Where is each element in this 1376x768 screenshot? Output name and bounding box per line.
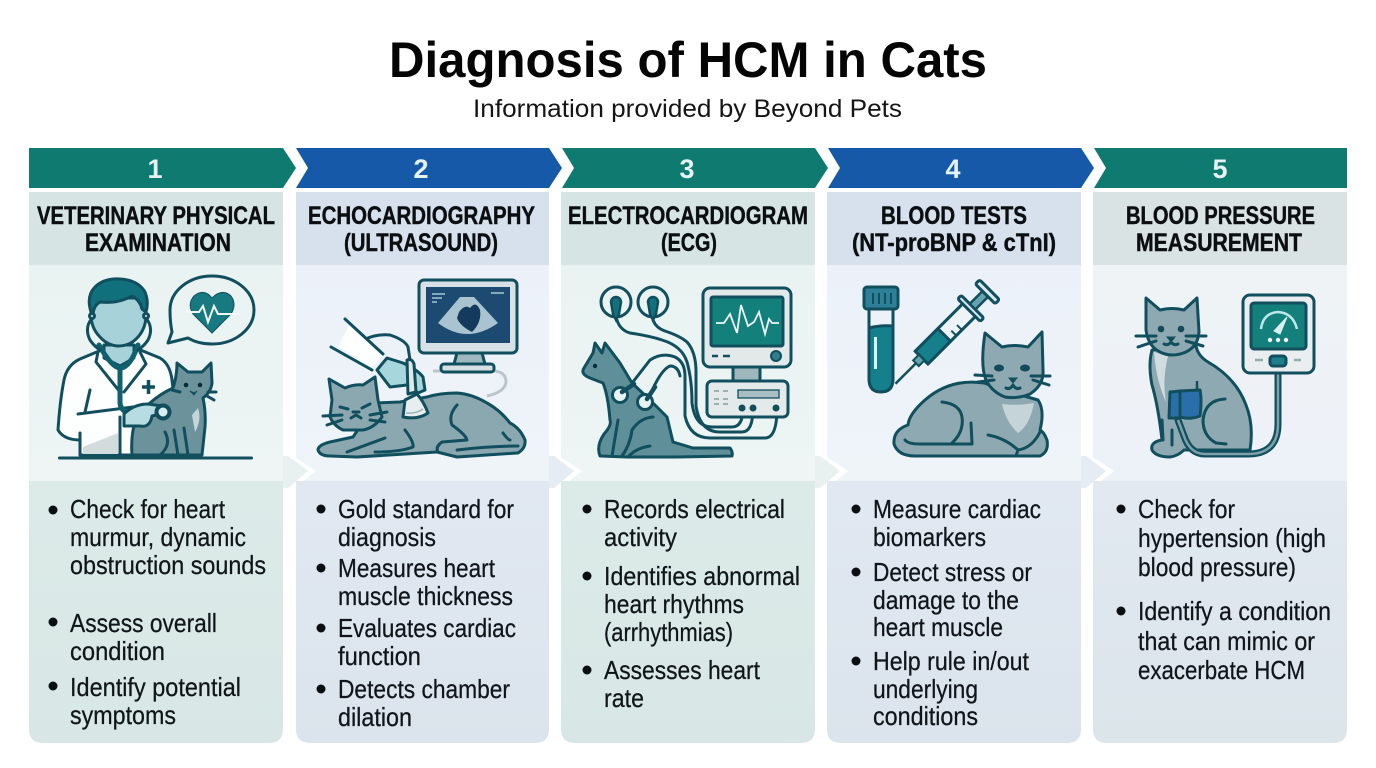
step 5 connector arrow	[1081, 450, 1114, 496]
panel: step 5 blood pressure measurement	[1081, 148, 1347, 743]
step 2 heading	[296, 192, 549, 265]
bullets panel: step 3: (arrhythmias)	[604, 617, 733, 647]
bullets panel: step 1: Identify potential	[70, 672, 241, 702]
step 5 heading	[1093, 192, 1347, 265]
step 4 heading: (NT-proBNP & cTnI)	[852, 229, 1056, 257]
step 4 illustration panel	[827, 265, 1081, 481]
bullets panel: step 4: conditions	[873, 701, 978, 731]
icon: blood pressure cuff on cat	[1136, 295, 1314, 457]
step 1 heading: VETERINARY PHYSICAL	[37, 202, 275, 230]
bullets panel: step 3: heart rhythms	[604, 589, 744, 619]
bullets panel: step 5: blood pressure)	[1138, 552, 1296, 582]
step 2 illustration panel	[296, 265, 549, 481]
bullets panel: step 1	[29, 481, 283, 743]
bullets panel: step 4: damage to the	[873, 585, 1019, 615]
step 4 heading	[827, 192, 1081, 265]
bullets panel: step 4: Help rule in/out	[873, 646, 1030, 676]
icon: blood tube, syringe and cat	[864, 278, 1050, 456]
bullets panel: step 3: Assesses heart	[604, 655, 761, 685]
bullets panel: step 1: obstruction sounds	[70, 550, 266, 580]
bullets panel: step 3: Identifies abnormal	[604, 561, 800, 591]
bullets panel: step 5: Check for	[1138, 494, 1235, 524]
bullets panel: step 1: condition	[70, 636, 165, 666]
bullets panel: step 4: Measure cardiac	[873, 494, 1041, 524]
step 4 connector arrow	[815, 450, 848, 496]
step 5 banner: 5	[1212, 154, 1228, 184]
panel: step 4 blood tests	[815, 148, 1094, 743]
bullets panel: step 4: Detect stress or	[873, 557, 1032, 587]
step 3 banner: 3	[679, 154, 695, 184]
bullets panel: step 5: exacerbate HCM	[1138, 655, 1305, 685]
step 3 banner	[562, 148, 828, 188]
step 3 heading	[561, 192, 815, 265]
step 3 heading: (ECG)	[661, 229, 717, 257]
step 1 banner	[29, 148, 296, 188]
step 1 illustration panel	[29, 265, 283, 481]
step 5 banner	[1094, 148, 1347, 188]
step 1 banner: 1	[147, 154, 163, 184]
bullets panel: step 1: murmur, dynamic	[70, 522, 246, 552]
step 2 connector arrow	[283, 450, 316, 496]
bullets panel: step 4: underlying	[873, 674, 978, 704]
bullets panel: step 2: function	[338, 641, 421, 671]
bullets panel: step 4: heart muscle	[873, 612, 1003, 642]
step 2 heading: (ULTRASOUND)	[344, 229, 498, 257]
bullets panel: step 3	[561, 481, 815, 743]
step 2 banner: 2	[413, 154, 429, 184]
step 5 illustration panel	[1093, 265, 1347, 481]
bullets panel: step 2: dilation	[338, 702, 412, 732]
step 3 illustration panel	[561, 265, 815, 481]
bullets panel: step 2	[296, 481, 549, 743]
step 3 heading: ELECTROCARDIOGRAM	[568, 202, 808, 230]
step 2 banner	[296, 148, 562, 188]
step 4 heading: BLOOD TESTS	[881, 202, 1027, 230]
bullets panel: step 4: biomarkers	[873, 522, 986, 552]
panel: step 2 echocardiography	[283, 148, 562, 743]
step 5 heading: MEASUREMENT	[1136, 229, 1302, 257]
bullets panel: step 2: Evaluates cardiac	[338, 613, 516, 643]
icon: ECG on cat	[583, 287, 791, 457]
icon: ultrasound on cat	[318, 280, 525, 457]
bullets panel: step 5: that can mimic or	[1138, 626, 1315, 656]
bullets panel: step 3: Records electrical	[604, 494, 785, 524]
bullets panel: step 3: rate	[604, 683, 644, 713]
step 1 heading: EXAMINATION	[85, 229, 231, 257]
bullets panel: step 2: Measures heart	[338, 553, 496, 583]
icon: veterinarian examining cat	[58, 276, 254, 460]
subtitle: Information provided by Beyond Pets	[473, 95, 902, 123]
bullets panel: step 2: Detects chamber	[338, 674, 510, 704]
step 2 heading: ECHOCARDIOGRAPHY	[308, 202, 535, 230]
step 5 heading: BLOOD PRESSURE	[1126, 202, 1315, 230]
bullets panel: step 2: diagnosis	[338, 522, 436, 552]
panel: step 1 veterinary physical examination	[29, 148, 296, 743]
bullets panel: step 1: symptoms	[70, 700, 176, 730]
bullets panel: step 1: Check for heart	[70, 494, 226, 524]
bullets panel: step 5	[1093, 481, 1347, 743]
bullets panel: step 4	[827, 481, 1081, 743]
step 3 connector arrow	[549, 450, 582, 496]
bullets panel: step 1: Assess overall	[70, 608, 217, 638]
bullets panel: step 5: hypertension (high	[1138, 523, 1326, 553]
title: Diagnosis of HCM in Cats	[389, 32, 987, 88]
step 1 heading	[29, 192, 283, 265]
bullets panel: step 2: muscle thickness	[338, 581, 513, 611]
bullets panel: step 2: Gold standard for	[338, 494, 514, 524]
step 4 banner	[828, 148, 1094, 188]
bullets panel: step 3: activity	[604, 522, 677, 552]
bullets panel: step 5: Identify a condition	[1138, 596, 1331, 626]
step 4 banner: 4	[945, 154, 961, 184]
panel: step 3 electrocardiogram	[549, 148, 828, 743]
